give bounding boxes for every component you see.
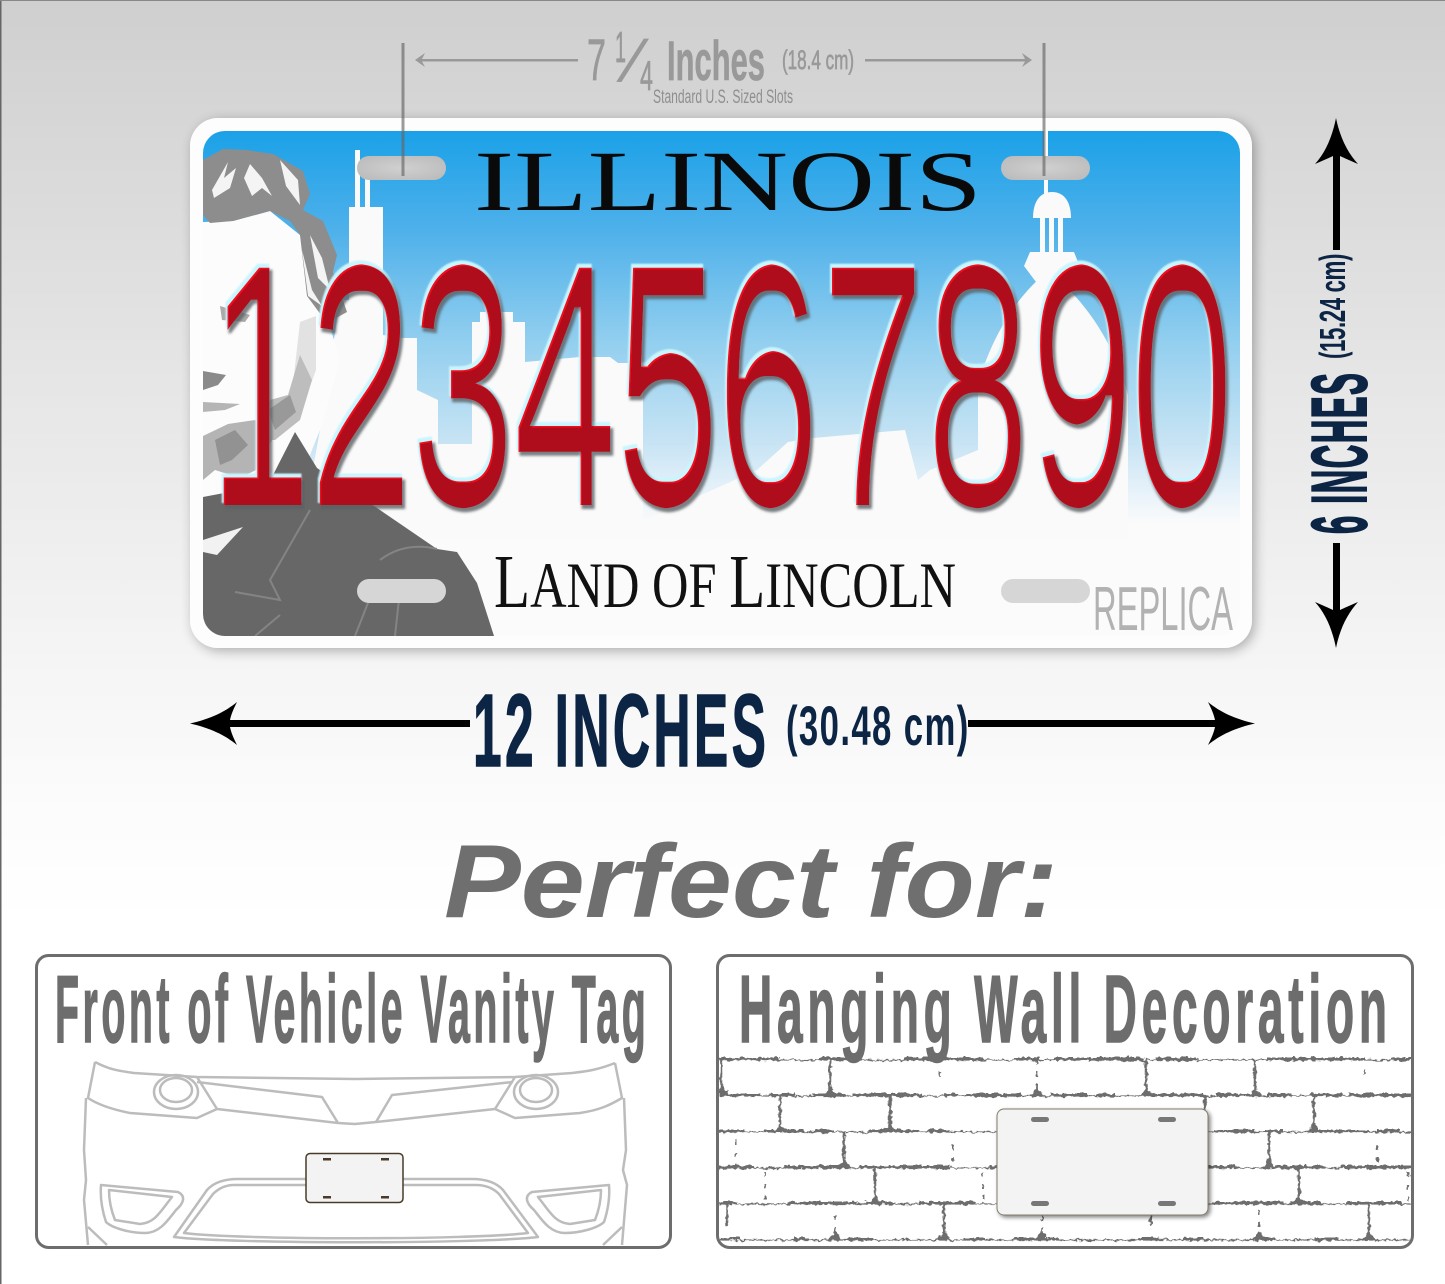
panel frame xyxy=(718,956,1412,1248)
coat shading xyxy=(203,527,243,555)
slot spacing label: 1 xyxy=(615,23,626,72)
eye and brow xyxy=(220,306,250,322)
right arrow xyxy=(968,702,1255,745)
width metric label: (30.48 cm) xyxy=(786,695,968,757)
plate artwork xyxy=(203,131,1240,636)
brick wall xyxy=(719,1059,1413,1240)
slot spacing label: Inches xyxy=(667,29,765,92)
slot: bottom left xyxy=(357,579,446,603)
sky gradient xyxy=(203,131,1240,515)
capitol dome xyxy=(1024,131,1078,282)
down arrow xyxy=(1315,543,1358,648)
plate number: 1 xyxy=(207,194,313,577)
slot: bottom right xyxy=(1001,579,1090,603)
panel frame xyxy=(36,956,670,1248)
plate number: 6 xyxy=(715,194,821,577)
right arrow xyxy=(865,53,1032,67)
plate number: 8 xyxy=(925,194,1031,577)
height label: 6 INCHES xyxy=(1296,373,1383,534)
slogan: LAND OF LINCOLN xyxy=(494,540,956,624)
cheek shading xyxy=(294,316,316,383)
slot spacing label: (18.4 cm) xyxy=(782,45,854,75)
slot spacing label: / xyxy=(612,29,652,94)
coat xyxy=(203,432,494,636)
hair xyxy=(203,149,347,323)
skyline silhouette xyxy=(300,131,1128,540)
plate body xyxy=(190,118,1252,648)
width label: 12 INCHES xyxy=(473,674,766,789)
Lincoln portrait xyxy=(203,149,494,636)
height dimension xyxy=(1296,118,1383,648)
slot spacing dimension xyxy=(402,23,1046,176)
plate number: 4 xyxy=(512,194,618,577)
left arrow xyxy=(415,53,578,67)
slot spacing label: Standard U.S. Sized Slots xyxy=(653,87,793,108)
license plate xyxy=(190,118,1252,648)
plate number: 3 xyxy=(410,194,516,577)
panel: front of vehicle xyxy=(36,956,670,1248)
panel heading: Hanging Wall Decoration xyxy=(739,955,1387,1062)
up arrow xyxy=(1315,118,1358,250)
wall plate xyxy=(997,1109,1208,1215)
plate number xyxy=(207,194,1235,577)
right guide line xyxy=(1042,43,1046,176)
left arrow xyxy=(190,702,470,745)
slot spacing label xyxy=(587,23,854,108)
replica mark: REPLICA xyxy=(1093,575,1233,644)
slot: top right xyxy=(1001,156,1090,180)
beard xyxy=(270,355,312,440)
panel heading: Front of Vehicle Vanity Tag xyxy=(55,956,646,1063)
slot spacing label: 7 xyxy=(587,28,606,93)
slot spacing label: 4 xyxy=(640,52,653,99)
heading: perfect for: Perfect for: xyxy=(444,824,1058,940)
panel: wall decoration xyxy=(718,955,1413,1248)
plate number: 2 xyxy=(308,194,414,577)
mini plate xyxy=(306,1154,403,1202)
car outline xyxy=(84,1062,627,1245)
left guide line xyxy=(402,43,404,176)
plate number: 0 xyxy=(1129,194,1235,577)
face xyxy=(203,211,340,500)
plate number: 9 xyxy=(1029,194,1135,577)
state name: ILLINOIS xyxy=(474,133,982,229)
plate number: 5 xyxy=(615,194,721,577)
plate number: 7 xyxy=(820,194,926,577)
width dimension xyxy=(190,674,1255,789)
slot: top left xyxy=(357,156,446,180)
height metric label: (15.24 cm) xyxy=(1314,254,1353,359)
